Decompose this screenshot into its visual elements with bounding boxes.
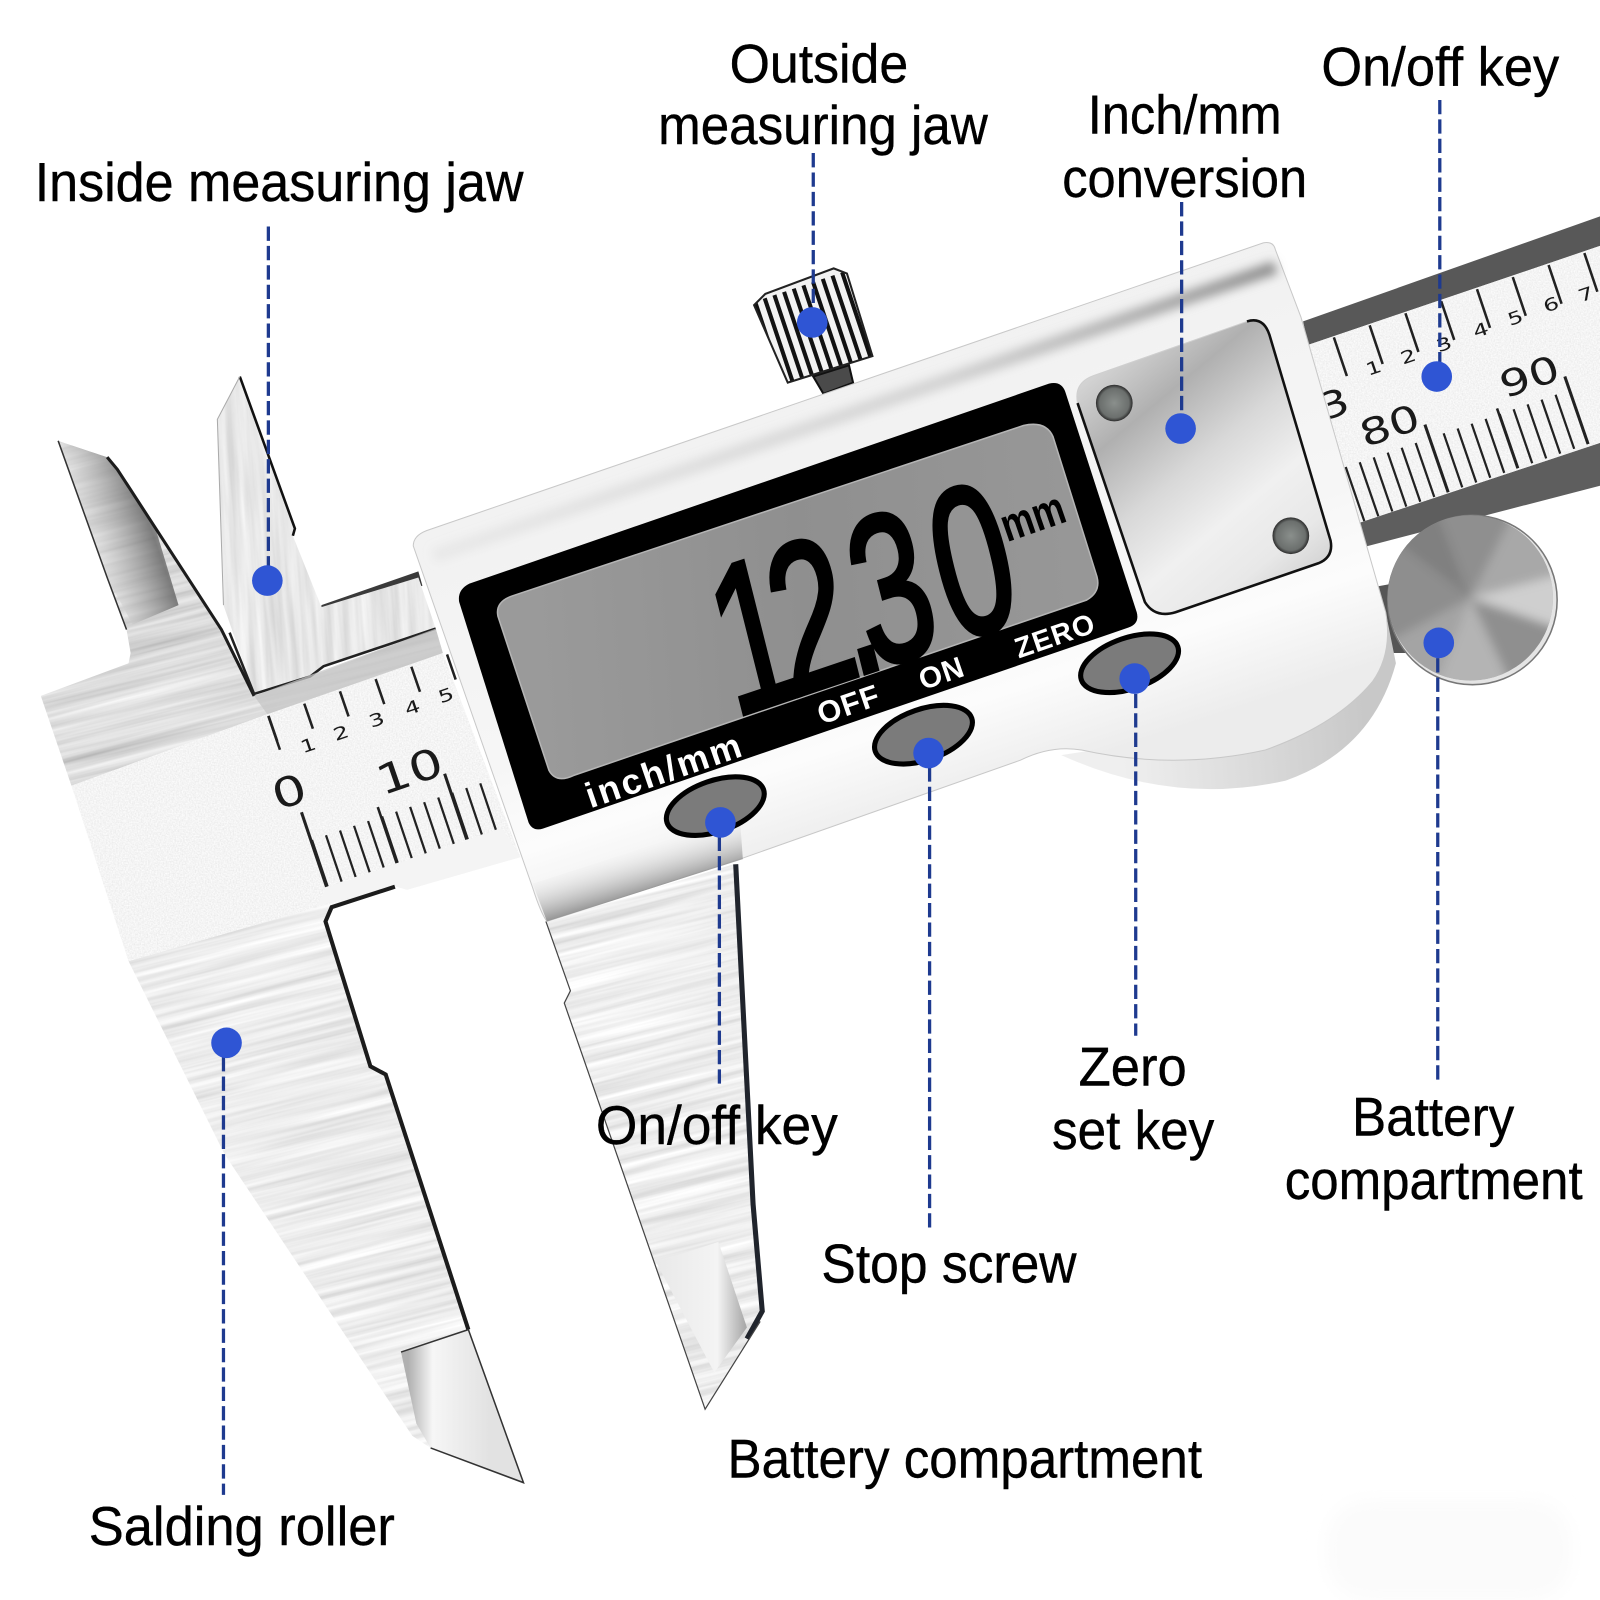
right scale numbers: 3 (1433, 332, 1455, 356)
button label OFF: OFF (813, 678, 885, 731)
button: off/on (867, 694, 980, 775)
inside measuring jaw (218, 379, 435, 692)
right scale numbers: 3 (1312, 380, 1355, 430)
right scale numbers: 5 (1505, 305, 1526, 330)
left scale numbers: 3 (366, 707, 387, 732)
label: Inch/mm conversion (1062, 84, 1307, 209)
left outside jaw, brushed grey (41, 441, 443, 786)
jaw texture (128, 892, 466, 1446)
battery cover plate (1077, 320, 1331, 614)
right scale numbers: 6 (1540, 292, 1562, 317)
right scale numbers: 2 (1398, 344, 1419, 369)
label: Outside measuring jaw (658, 33, 988, 156)
wheel stem (1376, 582, 1413, 653)
left scale numbers: 2 (330, 721, 351, 745)
right scale numbers: 7 (1575, 282, 1596, 306)
LCD unit: mm (993, 481, 1072, 552)
main scale plate (72, 654, 520, 961)
jaw tip recess (401, 1330, 523, 1483)
label: Zero set key: Zero (1079, 1036, 1187, 1098)
caliper body (413, 242, 1396, 921)
label: Battery compartment right: compartment (1285, 1149, 1583, 1211)
jaw inner dark edge (326, 887, 468, 1330)
right scale numbers: 80 (1354, 396, 1426, 457)
lower outside jaw, sliding side (128, 884, 525, 1484)
left scale numbers: 4 (402, 695, 423, 720)
button: zero (1073, 623, 1186, 704)
left jaw edge (58, 441, 127, 630)
button label inch/mm: inch/mm (580, 725, 749, 816)
left scale numbers: 0 (266, 765, 313, 820)
label: Outside measuring jaw: measuring jaw (658, 94, 988, 156)
button label ON: ON (914, 651, 969, 697)
left scale numbers: 5 (435, 683, 457, 707)
label: Salding roller: Salding roller (89, 1495, 395, 1557)
label: Inside measuring jaw: Inside measuring jaw (35, 151, 524, 213)
left inch ticks (267, 653, 462, 750)
label: Battery compartment right (1285, 1086, 1583, 1211)
beam dark lower band (1357, 443, 1600, 548)
knob shaft (813, 365, 853, 394)
jaw left edge (546, 921, 760, 1409)
inside jaw right edge (240, 377, 295, 536)
inside jaw left edge (217, 377, 240, 605)
label: Battery compartment bottom: Battery compartment (728, 1428, 1202, 1490)
dark edge of left jaw (107, 457, 254, 696)
label: Battery compartment right: Battery (1352, 1086, 1515, 1148)
label: On/off key bottom: On/off key (596, 1094, 838, 1156)
left scale numbers (266, 683, 457, 820)
LCD screen (498, 424, 1098, 779)
beam scale plate (1310, 246, 1600, 522)
button label ZERO: ZERO (1011, 608, 1100, 665)
right scale numbers: 90 (1494, 347, 1565, 408)
wheel brushed face (1388, 515, 1553, 681)
right scale numbers: 4 (1470, 318, 1491, 342)
label: Inch/mm conversion: conversion (1062, 147, 1307, 209)
label: Outside measuring jaw: Outside (730, 33, 908, 95)
knob outline (754, 268, 872, 383)
LCD reading: 12.30 (688, 434, 1037, 761)
left scale numbers: 10 (370, 739, 450, 805)
left scale numbers: 1 (298, 733, 319, 757)
scale upper strip (254, 629, 443, 714)
plate dark edge (1078, 320, 1331, 614)
jaw texture (547, 864, 760, 1408)
body bottom shade (533, 816, 743, 921)
leader lines (223, 100, 1440, 1495)
body underside lip (1061, 612, 1396, 789)
jaw right dark edge (736, 864, 762, 1339)
knurled head (755, 270, 872, 381)
inside jaw base edge (230, 629, 436, 694)
lower outside jaw, fixed side (545, 864, 765, 1410)
jaw tip recess (656, 1242, 747, 1372)
label: Zero set key: set key (1052, 1099, 1215, 1161)
display bezel (459, 383, 1137, 829)
beam dark upper band (1303, 216, 1600, 345)
jaw tip edge (401, 1330, 523, 1483)
marker dots (211, 307, 1454, 1058)
label: On/off key top: On/off key (1321, 36, 1560, 98)
right beam (1296, 216, 1600, 548)
beam dark top edge (321, 571, 422, 618)
label: Stop screw: Stop screw (821, 1233, 1077, 1295)
right scale numbers (1312, 282, 1596, 457)
plate screw top (1096, 385, 1133, 421)
body top highlight band (434, 267, 1276, 556)
stop screw knob (750, 263, 880, 394)
wheel rim (1388, 515, 1557, 685)
label: Zero set key (1052, 1036, 1215, 1161)
thumb wheel (1387, 514, 1558, 686)
right mm ticks (1340, 372, 1600, 521)
faint smudge bottom right (1327, 1500, 1571, 1600)
scale lower strip (316, 829, 520, 906)
label: Inch/mm conversion: Inch/mm (1088, 84, 1282, 146)
right inch ticks (1339, 266, 1600, 357)
left mm ticks (301, 754, 501, 887)
button: inch/mm (659, 765, 772, 847)
plate screw bottom (1272, 517, 1309, 554)
right scale numbers: 1 (1363, 355, 1384, 380)
body front (413, 242, 1388, 921)
